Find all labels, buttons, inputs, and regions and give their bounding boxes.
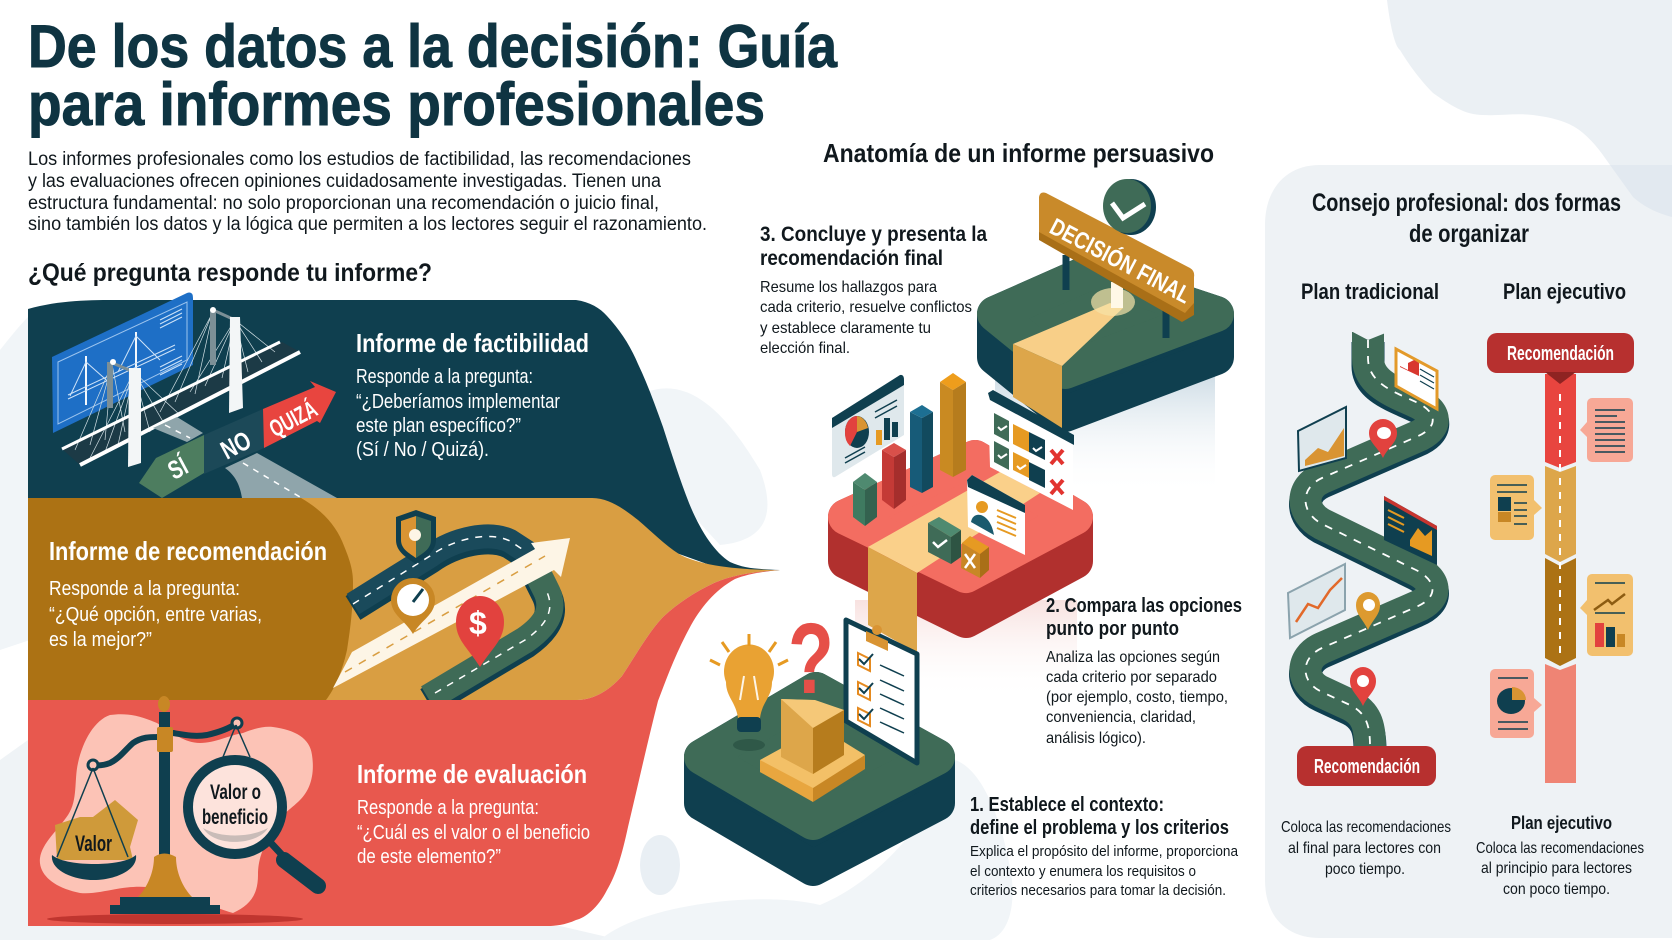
intro text: Los informes profesionales como los estudios de factibilidad, las recomendaciones — [28, 149, 691, 170]
icon: clipboard — [846, 620, 917, 763]
text: factibilidad: (Sí / No / Quizá). — [356, 439, 489, 461]
icon: bulb — [710, 634, 788, 751]
panel: pro tip — [1265, 165, 1672, 938]
band: factibilidad — [28, 293, 780, 574]
platform 1 — [702, 602, 937, 868]
text: recomendación: “¿Qué opción, entre varias, — [49, 604, 262, 626]
bars — [853, 373, 966, 526]
step 1 text: Explica el propósito del informe, proporciona — [970, 843, 1239, 860]
platform 2 — [832, 373, 1075, 653]
text: evaluación: “¿Cuál es el valor o el beneficio — [357, 822, 590, 844]
sign: decisión final: DECISIÓN FINAL — [1045, 213, 1195, 309]
step 2 text: (por ejemplo, costo, tiempo, — [1046, 689, 1228, 706]
step 2 text: cada criterio por separado — [1046, 669, 1217, 686]
title: para informes profesionales — [28, 71, 765, 138]
card: checklist — [988, 390, 1074, 510]
text: evaluación: Informe de evaluación — [357, 759, 587, 789]
step 1 text — [970, 794, 1239, 899]
icon: dollar pin: $ — [469, 605, 487, 641]
blob — [40, 714, 313, 913]
sign: Sí No Quizá: NO — [215, 425, 256, 465]
executive column — [1545, 374, 1576, 783]
text: factibilidad: Informe de factibilidad — [356, 328, 589, 358]
platform 3 — [995, 179, 1216, 428]
road cards and pins — [1288, 349, 1437, 706]
step 3 text: Resume los hallazgos para — [760, 279, 937, 296]
heading: plan tradicional: Plan tradicional — [1301, 279, 1439, 304]
cubes — [928, 517, 989, 578]
step 1 text: el contexto y enumera los requisitos o — [970, 863, 1196, 880]
panel: funnel report types — [28, 293, 780, 926]
text: factibilidad: “¿Deberíamos implementar — [356, 391, 560, 413]
step 3 text — [760, 223, 987, 357]
step 2 text — [1046, 595, 1242, 747]
callouts — [1490, 398, 1633, 738]
text: executive note — [1476, 813, 1644, 898]
text: factibilidad: este plan específico?” — [356, 415, 521, 437]
step 2 text: conveniencia, claridad, — [1046, 709, 1196, 726]
text: recomendación — [49, 536, 327, 651]
intro text: y las evaluaciones ofrecen opiniones cuidadosamente investigadas. Tienen una — [28, 171, 661, 192]
icon: bridge — [62, 307, 300, 467]
icon: shield — [396, 510, 436, 564]
card: profile — [967, 475, 1025, 555]
badge: recomendación inicio: Recomendación — [1507, 343, 1614, 365]
intro text — [28, 149, 707, 235]
icon: magnifier: Valor o — [210, 781, 261, 804]
icon: gauge pin — [391, 578, 435, 634]
step 3 text: 3. Concluye y presenta la — [760, 223, 987, 246]
road — [153, 417, 337, 498]
icon: box — [760, 699, 865, 802]
text: evaluación — [357, 759, 590, 868]
text: factibilidad — [356, 328, 589, 461]
heading: question: ¿Qué pregunta responde tu informe? — [28, 259, 432, 287]
step 2 text: análisis lógico). — [1046, 730, 1146, 747]
intro text: estructura fundamental: no solo proporcionan una recomendación o juicio final, — [28, 193, 659, 214]
icon: scale: Valor — [75, 831, 112, 856]
icon: dollar pin — [456, 596, 504, 667]
card: chart dashboard — [832, 375, 904, 477]
text: traditional note: Coloca las recomendaciones — [1281, 819, 1451, 836]
text: executive note: Plan ejecutivo — [1511, 813, 1612, 833]
text: traditional note: al final para lectores con — [1288, 840, 1441, 857]
step 1 text: define el problema y los criterios — [970, 817, 1229, 839]
badge: recomendación final — [1297, 746, 1436, 786]
step 1 text: criterios necesarios para tomar la decisión. — [970, 882, 1226, 899]
sign: Sí No Quizá: QUIZÁ — [265, 395, 322, 443]
step 2 text: Analiza las opciones según — [1046, 649, 1220, 666]
icon: magnifier: beneficio — [202, 806, 268, 829]
ribbon — [1013, 303, 1123, 366]
icon: question mark: ? — [788, 602, 834, 714]
text: recomendación: Informe de recomendación — [49, 536, 327, 566]
text: traditional note: poco tiempo. — [1325, 861, 1405, 878]
text: evaluación: de este elemento?” — [357, 846, 501, 868]
text: factibilidad: Responde a la pregunta: — [356, 366, 533, 388]
step 1 text: 1. Establece el contexto: — [970, 794, 1164, 816]
icon: check badge — [1103, 179, 1156, 235]
winding road — [1306, 328, 1433, 750]
icon: magnifier — [188, 760, 318, 886]
text: recomendación: Responde a la pregunta: — [49, 578, 240, 600]
icon: scale — [47, 696, 303, 924]
badge: recomendación final: Recomendación — [1314, 756, 1420, 778]
text: traditional note — [1281, 819, 1451, 878]
sign: Sí No Quizá: SÍ — [163, 450, 193, 486]
step 3 text: y establece claramente tu — [760, 320, 931, 337]
sign: decisión final — [1039, 192, 1195, 338]
badge: recomendación inicio — [1487, 333, 1634, 384]
sign: Sí No Quizá — [139, 381, 336, 498]
title — [28, 13, 838, 138]
stack shadows — [855, 375, 1215, 700]
step 2 text: punto por punto — [1046, 618, 1179, 640]
heading: anatomy: Anatomía de un informe persuasivo — [823, 138, 1214, 168]
panel title — [1312, 189, 1621, 248]
step 3 text: elección final. — [760, 340, 850, 357]
band: recomendación — [28, 498, 780, 702]
icon: blueprint — [52, 293, 193, 433]
panel title: de organizar — [1409, 220, 1529, 248]
title: De los datos a la decisión: Guía — [28, 13, 838, 80]
text: executive note: con poco tiempo. — [1503, 881, 1610, 898]
text: evaluación: Responde a la pregunta: — [357, 797, 539, 819]
step 3 text: recomendación final — [760, 247, 943, 270]
heading: plan ejecutivo: Plan ejecutivo — [1503, 279, 1626, 304]
band: evaluación — [28, 570, 780, 926]
step 2 text: 2. Compara las opciones — [1046, 595, 1242, 617]
text: executive note: al principio para lectores — [1481, 860, 1632, 877]
step 3 text: cada criterio, resuelve conflictos — [760, 299, 972, 316]
icon: roads and arrow — [333, 536, 570, 702]
text: recomendación: es la mejor?” — [49, 629, 152, 651]
intro text: sino también los datos y la lógica que permiten a los lectores seguir el razonamiento. — [28, 214, 707, 235]
